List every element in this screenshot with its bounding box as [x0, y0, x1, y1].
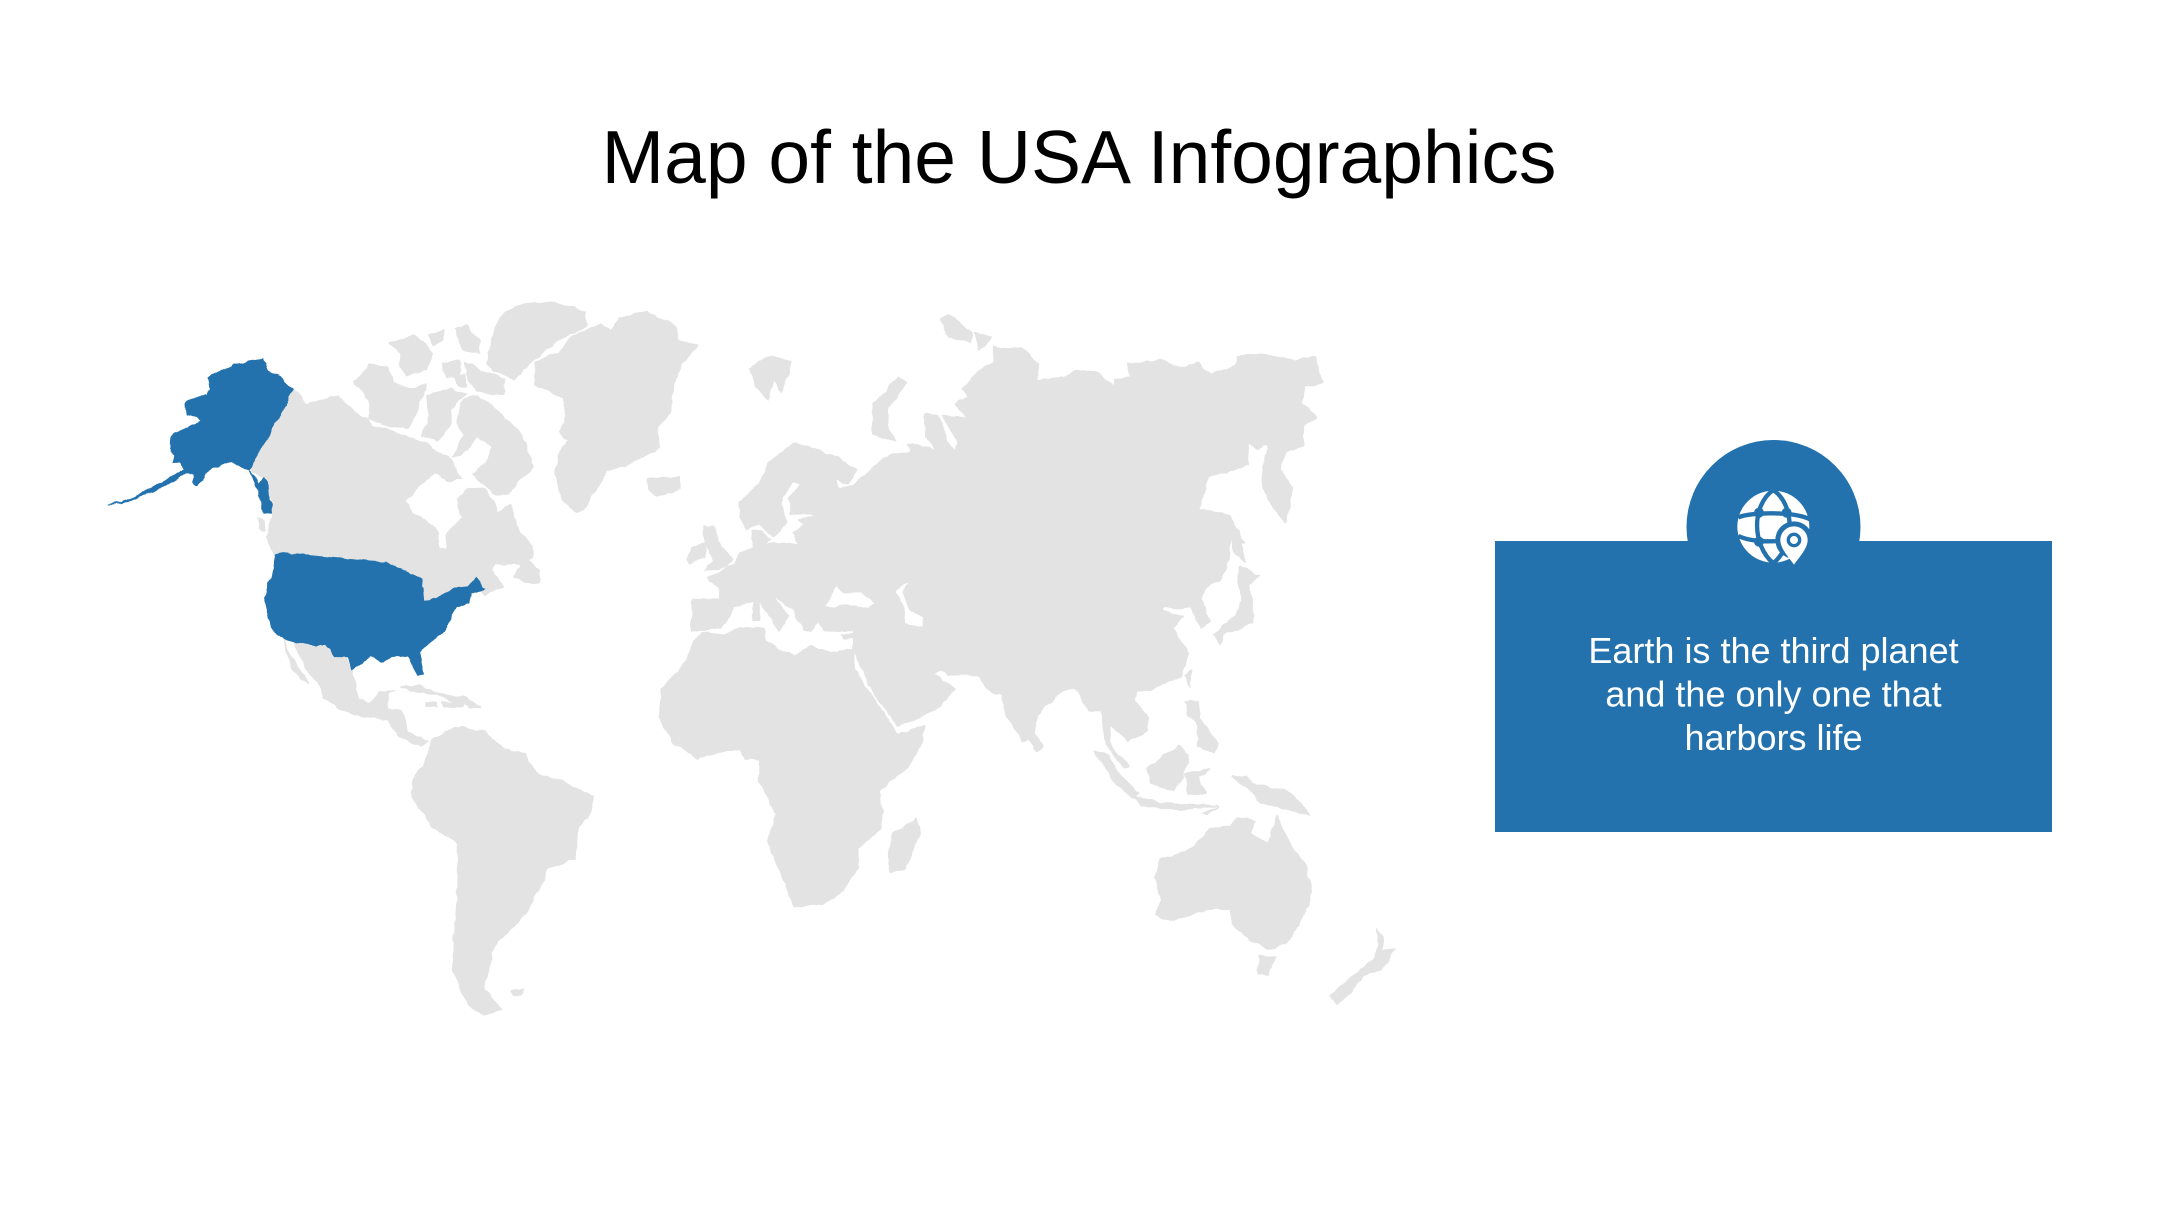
Baja California [283, 640, 309, 683]
callout text: harbors life [1684, 717, 1863, 758]
map: Americas, Greenland and Arctic islands [108, 302, 698, 1016]
Arctic islands [749, 315, 992, 441]
North America landmass [250, 389, 533, 603]
South America [413, 727, 593, 1016]
Japan [1213, 566, 1260, 644]
Africa [659, 628, 923, 907]
Madagascar [888, 817, 920, 871]
Australia [1155, 815, 1312, 949]
Mexico and Central America [294, 642, 428, 747]
Iceland [647, 477, 680, 496]
New Zealand [1330, 929, 1394, 1003]
Caspian Sea [895, 582, 923, 626]
Alaska [108, 359, 293, 505]
icon: globe with location pin [1737, 490, 1813, 565]
title: Map of the USA Infographics [602, 115, 1556, 199]
New Guinea [1233, 777, 1310, 815]
Mediterranean islands [753, 602, 853, 640]
Falkland Islands [512, 990, 524, 995]
Canadian islands [258, 302, 587, 582]
Alaska panhandle [250, 471, 273, 513]
Tasmania [1259, 956, 1276, 975]
highlighted USA [108, 359, 485, 676]
Black Sea [826, 585, 876, 609]
callout text: and the only one that [1605, 674, 1942, 714]
Greenland [535, 312, 698, 513]
Southeast Asian islands [1033, 670, 1219, 815]
callout circle tab [1686, 440, 1860, 614]
Eurasia [692, 347, 1322, 767]
contiguous United States [264, 553, 485, 676]
callout box [1495, 541, 2052, 832]
callout text: Earth is the third planet [1588, 630, 1959, 671]
callout panel [1495, 440, 2052, 832]
map: Eurasia, Africa and Oceania [659, 315, 1394, 1003]
British Isles [687, 526, 732, 571]
world map [108, 302, 1394, 1016]
Caribbean islands [401, 686, 480, 707]
